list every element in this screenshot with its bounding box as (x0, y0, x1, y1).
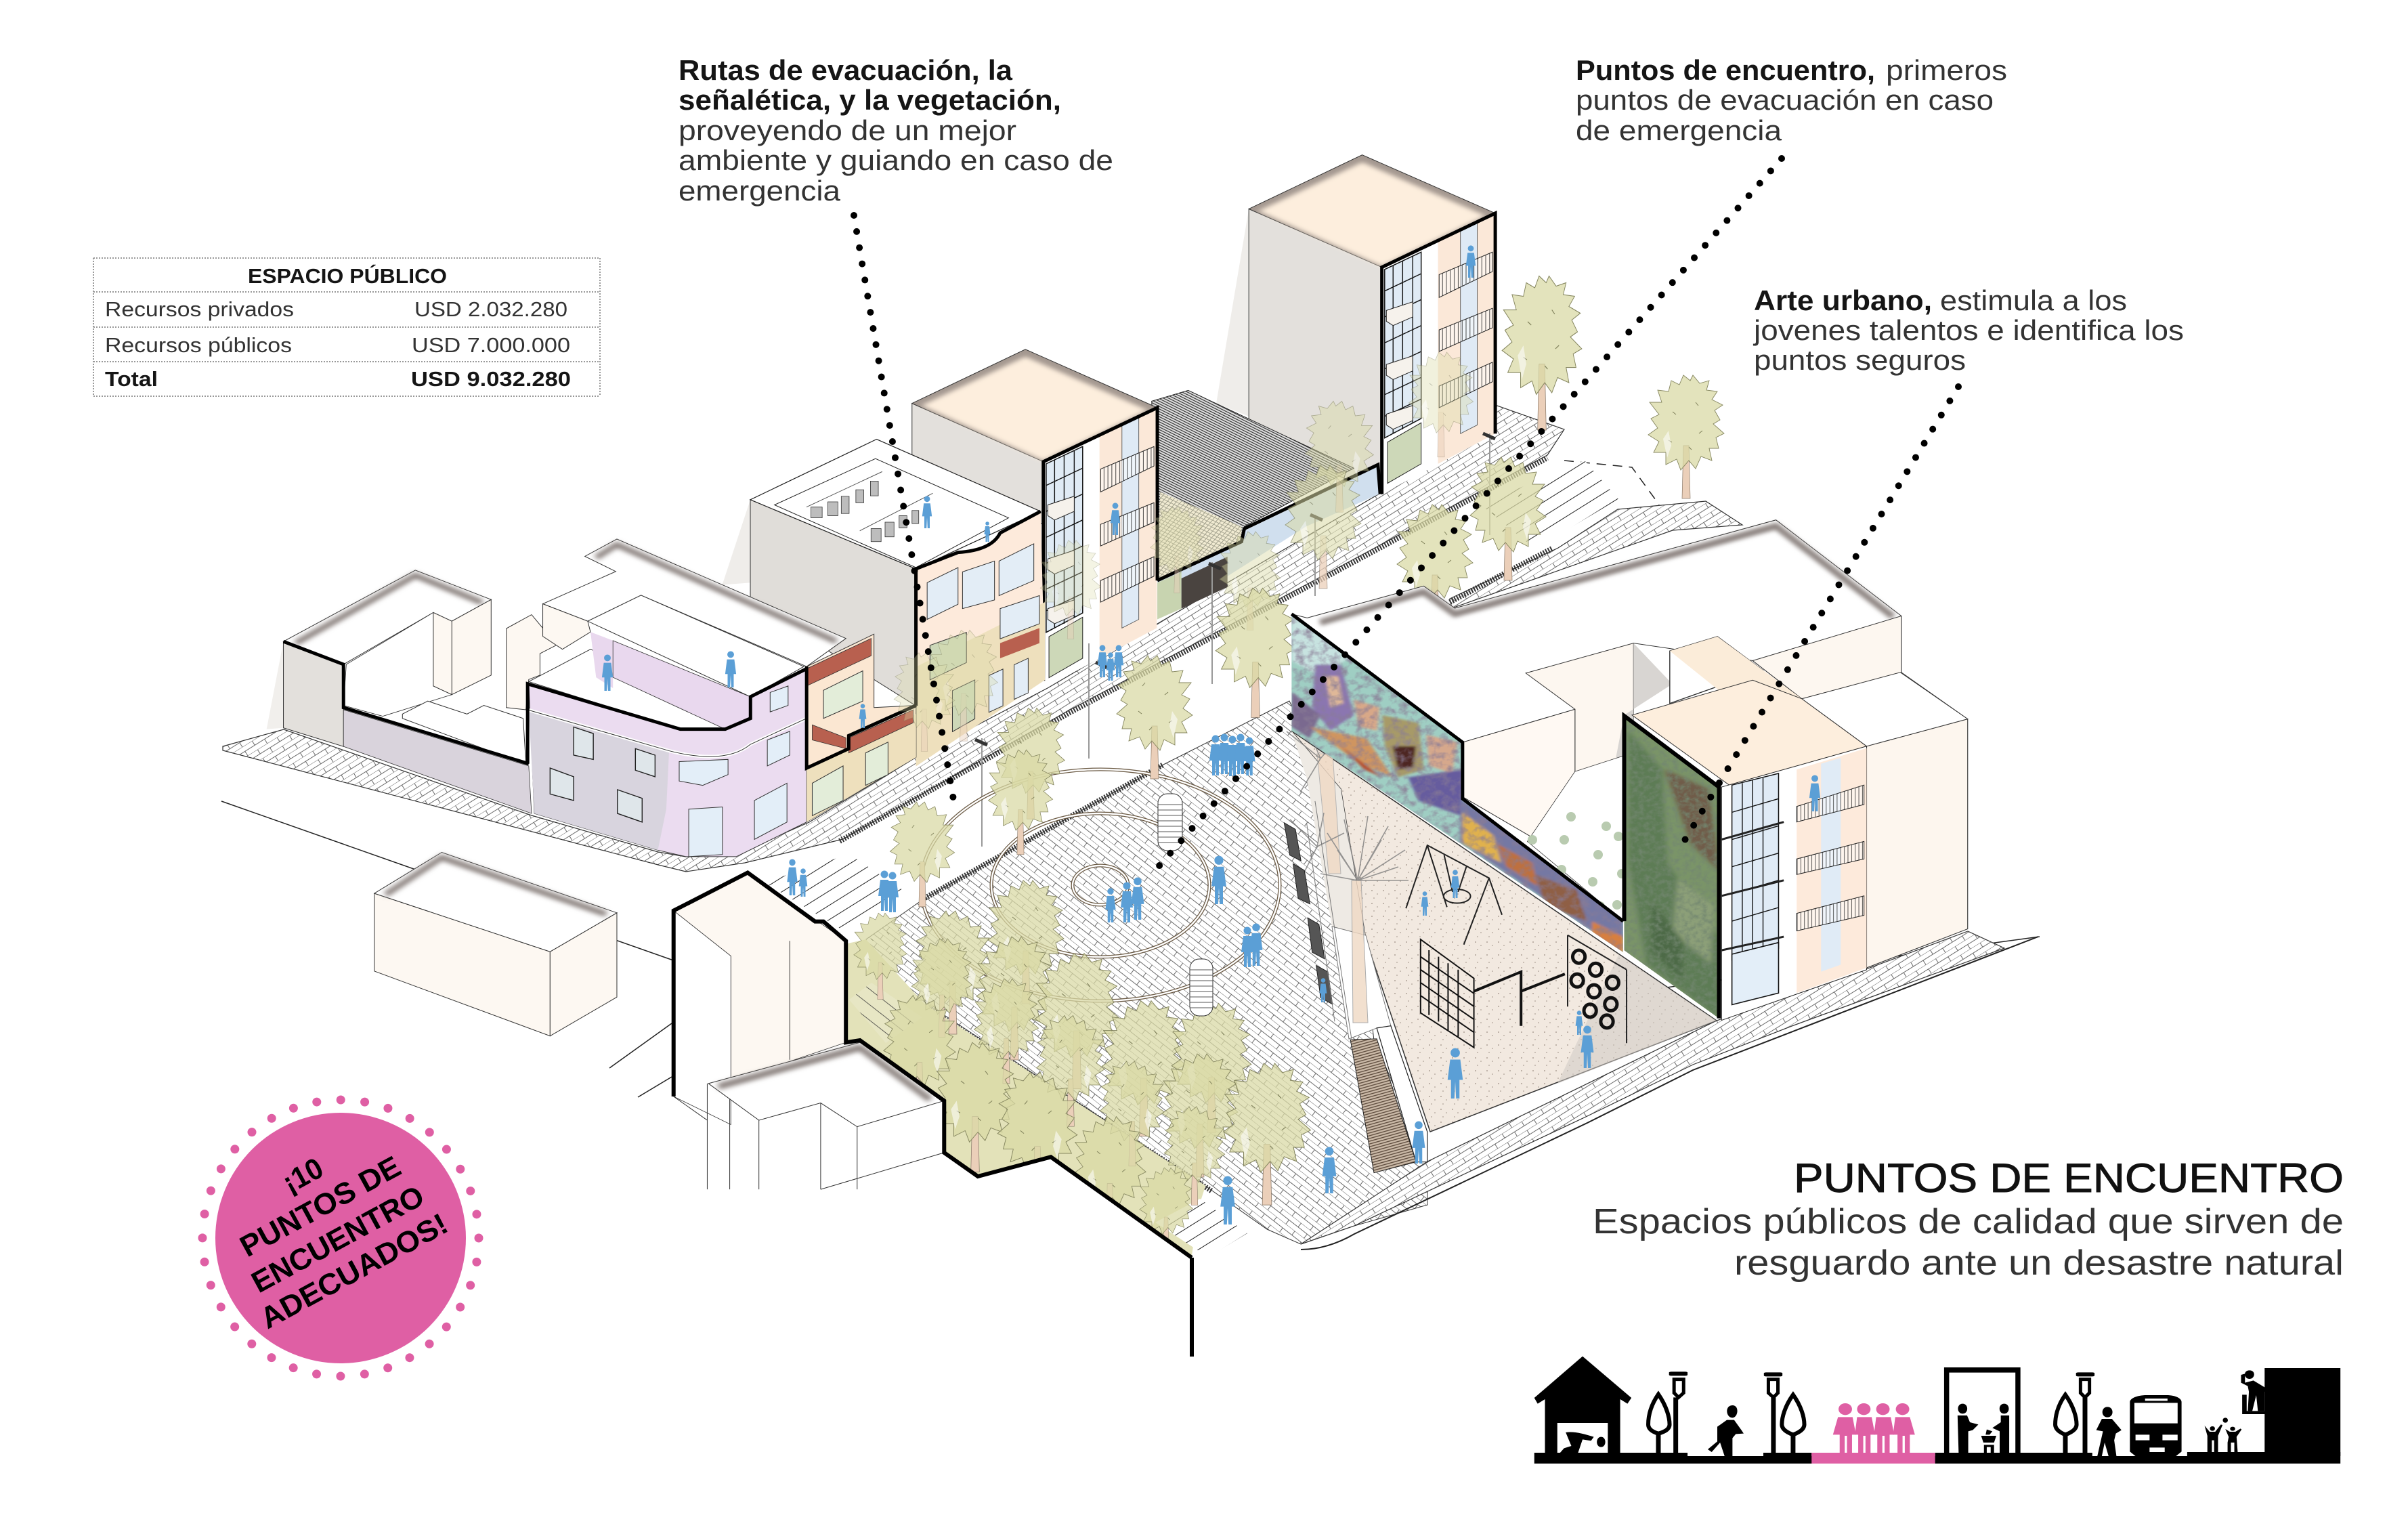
far sidewalk with crosswalk (1450, 461, 1742, 608)
funding table: USD 2.032.280 (414, 297, 567, 321)
mural paint texture (1291, 614, 1623, 952)
street lines (221, 461, 2040, 1281)
crosswalks: south of plaza (849, 983, 1247, 1257)
sidewalk: south of playground (1301, 931, 2004, 1244)
callout: rutas de evacuación: ambiente y guiando en caso de (679, 144, 1113, 176)
crosswalk: north of plaza (765, 854, 911, 932)
green wall foliage texture (1625, 716, 1719, 1019)
vertical green wall (1625, 716, 1719, 1019)
boundary street line (1301, 937, 2038, 1250)
pink corner building (507, 539, 846, 857)
icon: house shelter (1534, 1357, 1631, 1453)
badge: 10 puntos de encuentro (202, 1100, 479, 1376)
street mural (1291, 614, 1623, 953)
left block with thick section line (267, 570, 532, 813)
callout: rutas de evacuación: proveyendo de un mejor (679, 114, 1016, 146)
courtyard shrubs (1528, 812, 1627, 911)
icon: open market frame (1944, 1367, 2021, 1453)
playground sand area (1291, 731, 1717, 1132)
callout: rutas de evacuación: Rutas de evacuación, la (679, 54, 1013, 86)
callout: puntos de encuentro: primeros (1886, 54, 2007, 86)
plaza paving (866, 701, 1427, 1244)
funding table (93, 258, 600, 396)
funding table: ESPACIO PÚBLICO (248, 263, 447, 288)
icon: pink group of four people (1833, 1403, 1915, 1453)
narrow building with red railings (807, 634, 916, 822)
icon: two people with plant (1958, 1404, 2009, 1455)
callout: rutas de evacuación (679, 54, 1113, 207)
icon: lamp and tree 1 (1648, 1371, 1687, 1453)
icon strip: street section pictogram (1534, 1357, 2340, 1464)
playground equipment (1406, 845, 1627, 1048)
badge: 10 puntos de encuentro: ¡10 (277, 1151, 329, 1200)
dotted leader: rutas de evacuación (854, 215, 955, 811)
peach corner building with roof clotheslines (723, 440, 1045, 766)
callout: puntos de encuentro: Puntos de encuentro, (1576, 54, 1875, 86)
standalone cream block (374, 852, 617, 1036)
callout: arte urbano: estimula a los (1940, 284, 2127, 316)
benches and access ramp (1284, 801, 1427, 1173)
thick-outlined lower block (674, 872, 1192, 1371)
column stacks on plaza (1158, 794, 1213, 1016)
sidewalk: upper street (223, 406, 1564, 872)
dotted leader: puntos de encuentro (1155, 158, 1782, 870)
icon: lamp and tree 2 (1764, 1372, 1804, 1453)
front apartment facade (1721, 746, 1867, 1020)
title block: resguardo ante un desastre natural (1734, 1243, 2344, 1283)
circular plaza rings (921, 769, 1280, 1001)
back building block (1291, 520, 1968, 968)
icon: lamp and tree 3 (2055, 1372, 2094, 1453)
icon: person crawling (1560, 1432, 1606, 1453)
title block: PUNTOS DE ENCUENTRO (1794, 1155, 2344, 1201)
icon: person walking (2097, 1407, 2122, 1456)
funding table: Total (105, 367, 158, 391)
callout: arte urbano: puntos seguros (1754, 344, 1966, 376)
ground bar (1534, 1452, 2340, 1464)
callout: arte urbano (1753, 284, 2184, 376)
callout: puntos de encuentro (1576, 54, 2007, 146)
icon: bus (2130, 1395, 2182, 1458)
callout: rutas de evacuación: emergencia (679, 175, 841, 207)
funding table: Recursos públicos (105, 333, 292, 357)
title block: Espacios públicos de calidad que sirven de (1593, 1202, 2344, 1241)
tree zone south-west of plaza (846, 939, 1205, 1257)
trees (854, 276, 1724, 1254)
icon: children playing (2205, 1418, 2241, 1452)
dotted leader: arte urbano (1680, 387, 1958, 848)
badge: 10 puntos de encuentro: ENCUENTRO (246, 1179, 430, 1300)
palm trees (1287, 718, 1409, 1023)
icon: person running (1708, 1405, 1744, 1456)
section line drop (1190, 1258, 1194, 1357)
funding table: USD 7.000.000 (412, 333, 570, 357)
callout: arte urbano: jovenes talentos e identifica los (1753, 314, 2184, 346)
pink gathering platform (1811, 1453, 1935, 1464)
callout: puntos de encuentro: de emergencia (1576, 114, 1782, 146)
icon: dark building with painter (2242, 1368, 2340, 1456)
title block (1593, 1155, 2344, 1283)
callout: arte urbano: Arte urbano, (1754, 284, 1932, 316)
blue pedestrians (602, 245, 1820, 1224)
callout: puntos de encuentro: puntos de evacuación en caso (1576, 84, 1994, 116)
badge: 10 puntos de encuentro: ADECUADOS! (255, 1207, 454, 1336)
lamp posts along street (975, 433, 1495, 847)
funding table: USD 9.032.280 (411, 367, 571, 391)
badge: 10 puntos de encuentro: PUNTOS DE (234, 1150, 406, 1264)
mid apartment tower (912, 349, 1157, 689)
callout: rutas de evacuación: señalética, y la vegetación, (679, 84, 1061, 116)
tall apartment tower (1216, 155, 1495, 494)
funding table: Recursos privados (105, 297, 294, 321)
corrugated roof building (1152, 390, 1380, 620)
